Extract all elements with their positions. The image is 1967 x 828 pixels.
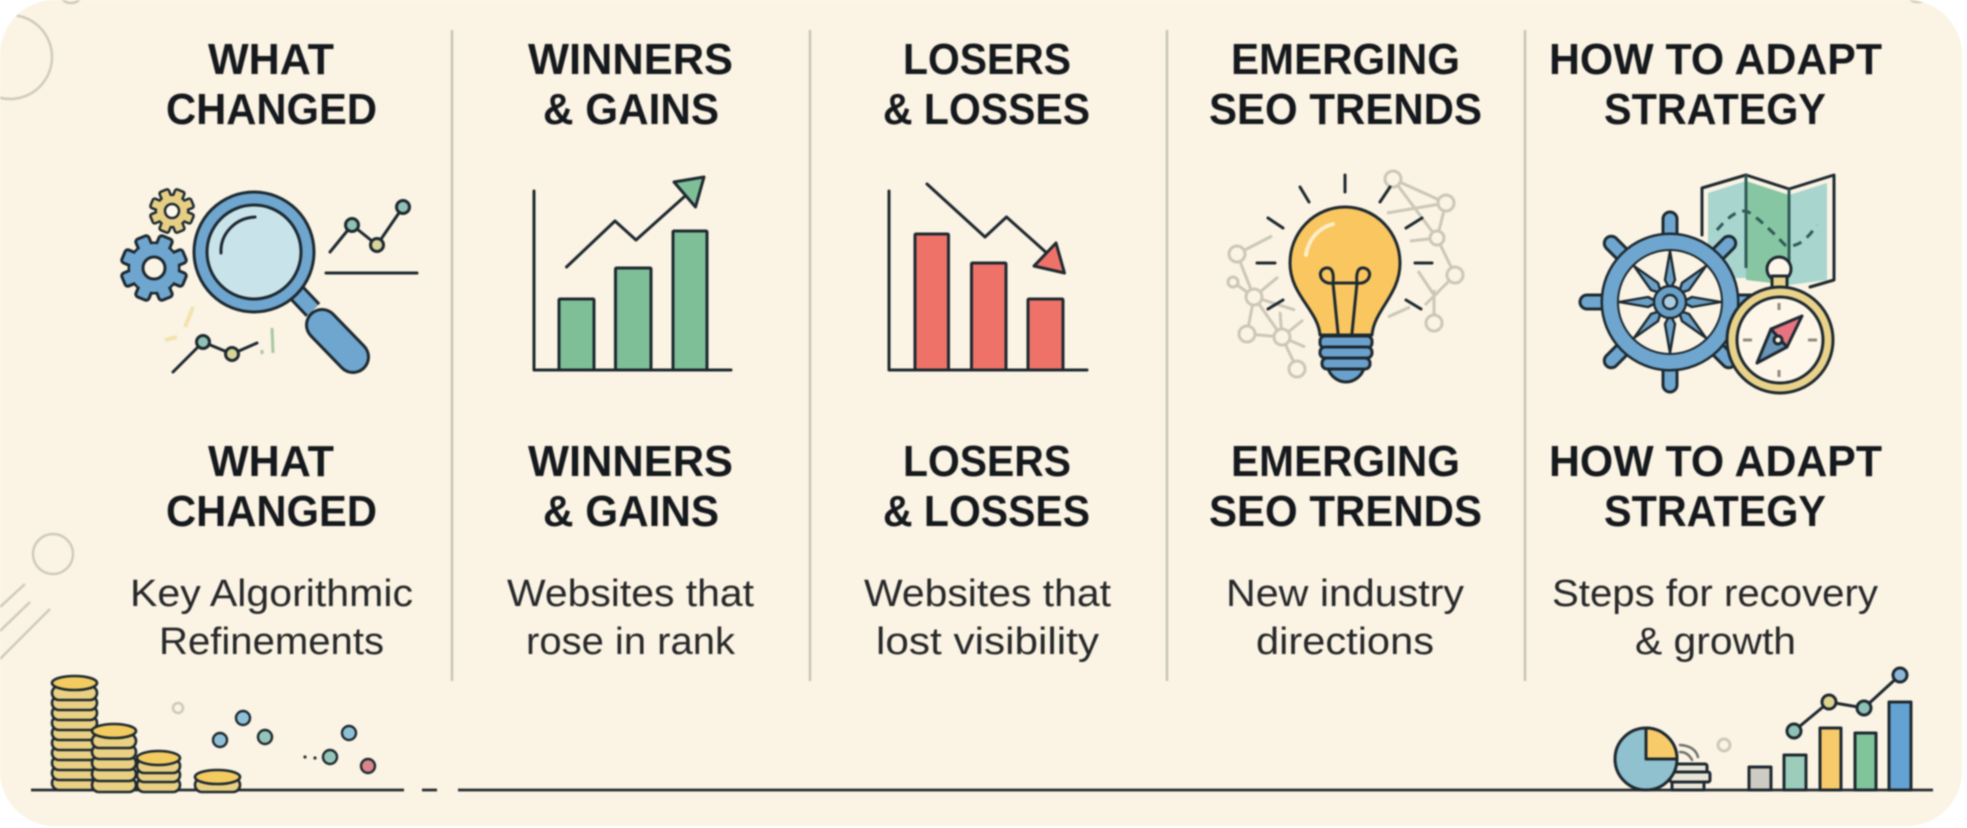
- ground line: [31, 789, 1933, 791]
- icon: ship wheel, map and compass: [1580, 175, 1834, 393]
- description: how to adapt: [1552, 573, 1878, 663]
- heading: what changed repeat: [166, 437, 377, 536]
- heading: how to adapt strategy: HOW TO ADAPT: [1549, 35, 1882, 84]
- heading: emerging seo trends repeat: EMERGING: [1231, 437, 1460, 486]
- heading: winners and gains repeat: WINNERS: [528, 437, 733, 486]
- column: how to adapt strategy: [1549, 35, 1882, 663]
- description: how to adapt: & growth: [1635, 621, 1796, 663]
- heading: winners and gains: [528, 35, 733, 134]
- description: winners: rose in rank: [526, 621, 736, 663]
- decorative corner shapes: [0, 0, 1932, 659]
- description: winners: Websites that: [507, 573, 754, 615]
- heading: losers and losses repeat: [883, 437, 1090, 536]
- description: emerging trends: New industry: [1226, 573, 1464, 615]
- heading: losers and losses repeat: & LOSSES: [883, 487, 1090, 536]
- illustration: growth bar chart: [1749, 668, 1911, 790]
- description: emerging trends: [1226, 573, 1464, 663]
- heading: winners and gains: & GAINS: [543, 85, 719, 134]
- icon: light bulb with network: [1228, 171, 1463, 382]
- description: what changed: Refinements: [159, 621, 384, 663]
- heading: emerging seo trends: EMERGING: [1231, 35, 1460, 84]
- heading: how to adapt strategy repeat: [1549, 437, 1882, 536]
- column: winners and gains: [507, 35, 754, 663]
- heading: how to adapt strategy: [1549, 35, 1882, 134]
- heading: winners and gains: WINNERS: [528, 35, 733, 84]
- heading: emerging seo trends repeat: [1209, 437, 1482, 536]
- heading: emerging seo trends repeat: SEO TRENDS: [1209, 487, 1482, 536]
- heading: how to adapt strategy repeat: STRATEGY: [1604, 487, 1826, 536]
- heading: what changed: [166, 35, 377, 134]
- heading: losers and losses repeat: LOSERS: [903, 437, 1071, 486]
- heading: how to adapt strategy: STRATEGY: [1604, 85, 1826, 134]
- illustration: coin stacks: [52, 676, 240, 792]
- column: losers and losses: [864, 35, 1111, 663]
- heading: losers and losses: [883, 35, 1090, 134]
- illustration: pie chart and books: [1615, 728, 1730, 790]
- scattered dots: [173, 703, 375, 773]
- heading: winners and gains repeat: [528, 437, 733, 536]
- description: what changed: Key Algorithmic: [130, 573, 413, 615]
- heading: emerging seo trends: [1209, 35, 1482, 134]
- heading: what changed repeat: CHANGED: [166, 487, 377, 536]
- heading: what changed repeat: WHAT: [208, 437, 334, 486]
- description: losers: [864, 573, 1111, 663]
- heading: what changed: CHANGED: [166, 85, 377, 134]
- heading: emerging seo trends: SEO TRENDS: [1209, 85, 1482, 134]
- description: how to adapt: Steps for recovery: [1552, 573, 1878, 615]
- column: what changed: [121, 35, 417, 663]
- description: losers: Websites that: [864, 573, 1111, 615]
- heading: losers and losses: LOSERS: [903, 35, 1071, 84]
- heading: what changed: WHAT: [208, 35, 334, 84]
- description: what changed: [130, 573, 413, 663]
- heading: winners and gains repeat: & GAINS: [543, 487, 719, 536]
- column dividers: [452, 30, 1525, 681]
- icon: rising bar chart: [534, 177, 731, 370]
- column: emerging seo trends: [1209, 35, 1482, 663]
- description: winners: [507, 573, 754, 663]
- icon: falling bar chart: [889, 184, 1087, 370]
- heading: losers and losses: & LOSSES: [883, 85, 1090, 134]
- heading: how to adapt strategy repeat: HOW TO ADAPT: [1549, 437, 1882, 486]
- icon: magnifying glass with gears and charts: [121, 189, 417, 372]
- description: losers: lost visibility: [876, 621, 1099, 663]
- description: emerging trends: directions: [1256, 621, 1434, 663]
